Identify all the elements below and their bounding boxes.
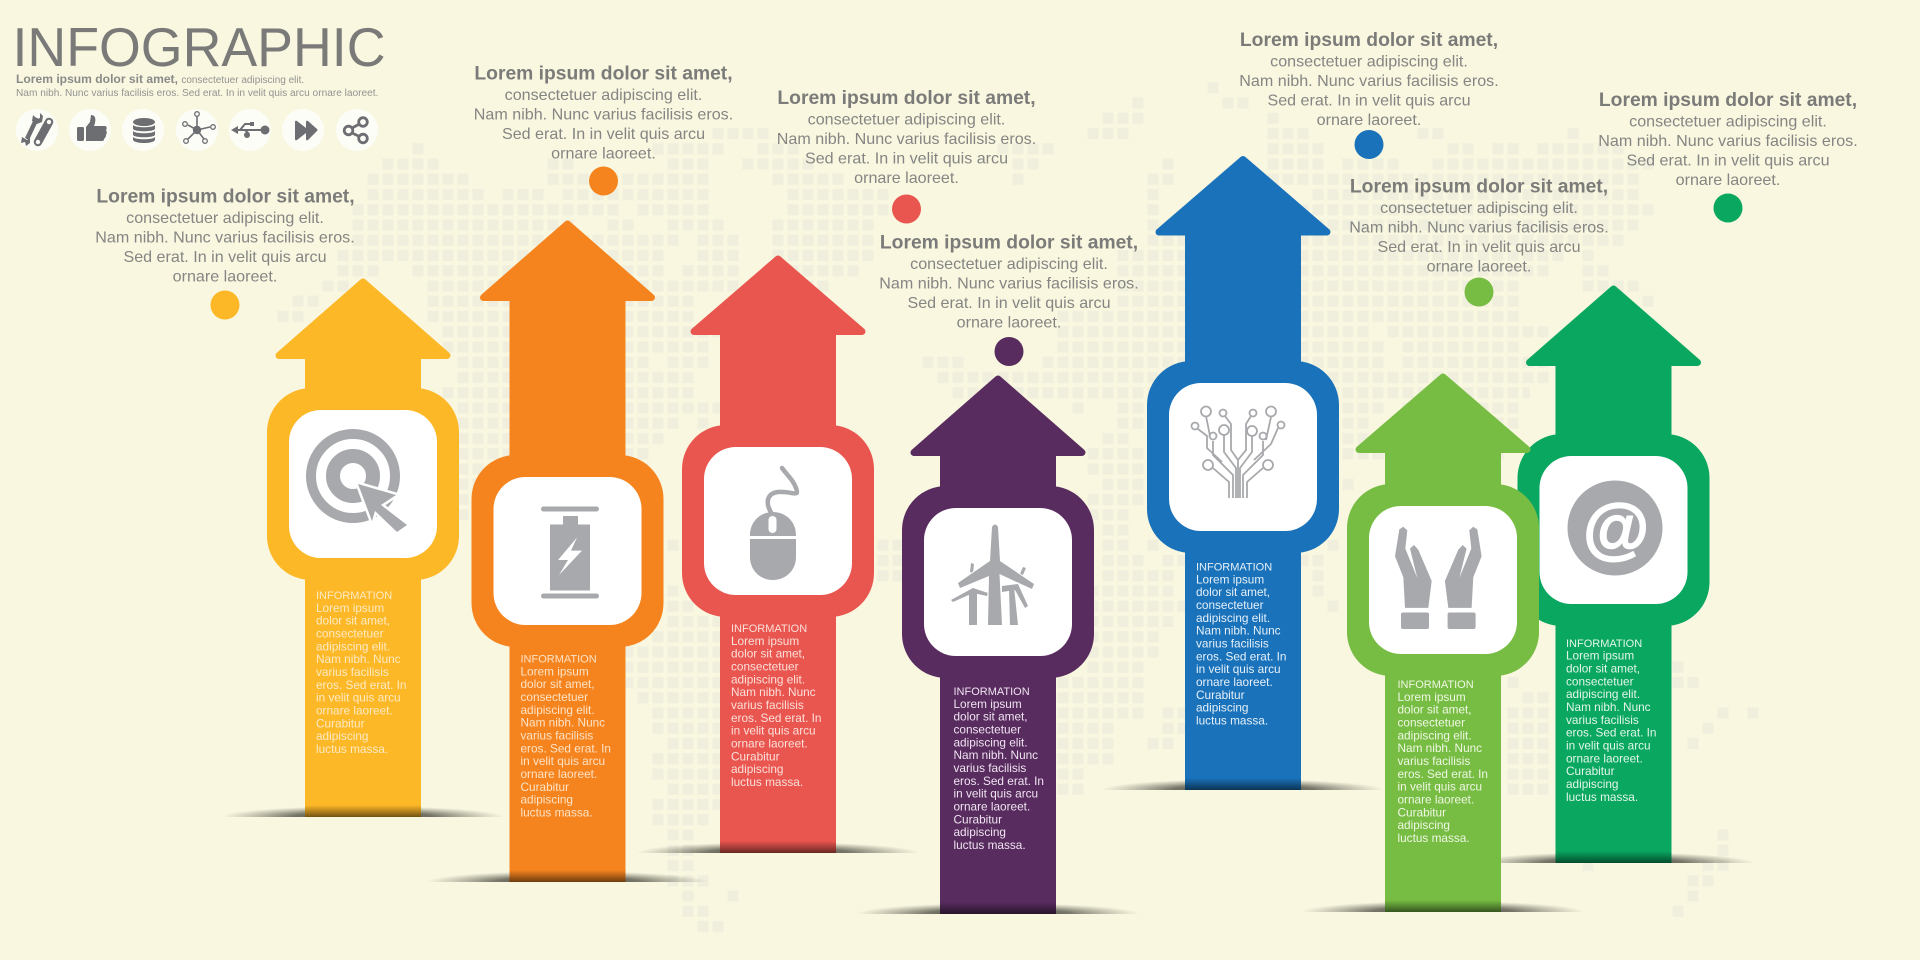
information text: luctus massa. (520, 805, 593, 819)
information text: varius facilisis (1398, 754, 1470, 768)
information text: luctus massa. (954, 838, 1026, 852)
callout: red (777, 88, 1036, 224)
information text: INFORMATION (954, 686, 1030, 698)
icon: wrenches (16, 109, 58, 151)
information text: Curabitur (1196, 688, 1245, 702)
arrow: orange (426, 224, 710, 882)
information text: in velit quis arcu (1398, 780, 1482, 794)
callout: blue: consectetuer adipiscing elit. (1270, 52, 1468, 70)
callout: purple: Lorem ipsum dolor sit amet, (880, 232, 1138, 254)
information text: dolor sit amet, (316, 614, 390, 628)
information text: in velit quis arcu (1196, 662, 1281, 676)
callout: lime: Nam nibh. Nunc varius facilisis eros. (1349, 218, 1609, 236)
callout: green: Nam nibh. Nunc varius facilisis eros. (1598, 132, 1858, 150)
information text: in velit quis arcu (731, 724, 816, 738)
information text: ornare laoreet. (1566, 751, 1643, 765)
arrow: blue (1101, 160, 1385, 790)
callout: purple: ornare laoreet. (957, 313, 1061, 331)
information text: luctus massa. (731, 775, 803, 789)
icon: open hands (1395, 527, 1482, 629)
information text: Curabitur (520, 780, 569, 794)
information text: Nam nibh. Nunc (1566, 700, 1651, 714)
callout: orange: ornare laoreet. (551, 144, 656, 162)
callout: green (1598, 90, 1858, 222)
icon: at sign: @ (1582, 491, 1648, 567)
information text: INFORMATION (520, 654, 597, 666)
information text: adipiscing elit. (1196, 611, 1270, 625)
icon: network (176, 109, 218, 151)
callout: purple: consectetuer adipiscing elit. (910, 255, 1108, 273)
callout: yellow: Sed erat. In in velit quis arcu (123, 248, 327, 266)
arrow: red (636, 259, 920, 853)
callout: green: ornare laoreet. (1676, 171, 1780, 189)
information text: ornare laoreet. (954, 799, 1030, 813)
callout: yellow: Nam nibh. Nunc varius facilisis eros. (95, 228, 355, 246)
information text: adipiscing elit. (520, 703, 595, 717)
icon: usb (229, 109, 271, 151)
information text: adipiscing (1196, 701, 1248, 715)
icon: database (122, 109, 164, 151)
callout: lime: Lorem ipsum dolor sit amet, (1350, 176, 1608, 198)
information text: eros. Sed erat. In (520, 741, 611, 755)
callout: blue: Nam nibh. Nunc varius facilisis eros. (1239, 72, 1499, 90)
information text: eros. Sed erat. In (1398, 767, 1488, 781)
information text: dolor sit amet, (1398, 703, 1472, 717)
information text: eros. Sed erat. In (731, 711, 822, 725)
information text: varius facilisis (1566, 713, 1639, 727)
callout: green: Lorem ipsum dolor sit amet, (1599, 90, 1857, 111)
information text: consectetuer (1398, 715, 1465, 729)
information text: adipiscing elit. (316, 639, 390, 653)
information text: INFORMATION (1196, 562, 1272, 574)
information text: Curabitur (1566, 764, 1615, 778)
icon: circuit tree (1192, 406, 1284, 498)
information text: adipiscing (954, 825, 1006, 839)
callout: orange (474, 64, 733, 196)
information text: ornare laoreet. (1398, 792, 1474, 806)
information text: dolor sit amet, (1566, 661, 1640, 675)
information text: varius facilisis (1196, 636, 1269, 650)
icon: target with cursor (311, 434, 407, 532)
information text: luctus massa. (316, 742, 388, 756)
header subtitle: Lorem ipsum dolor sit amet, consectetuer adipiscing elit. (16, 72, 304, 86)
callout: orange: Sed erat. In in velit quis arcu (502, 125, 705, 143)
header block (12, 17, 386, 151)
information text: eros. Sed erat. In (1566, 726, 1656, 740)
information text: Nam nibh. Nunc (731, 685, 816, 699)
callout: lime: consectetuer adipiscing elit. (1380, 199, 1578, 217)
information text: adipiscing (520, 793, 573, 807)
arrow: lime (1301, 377, 1585, 912)
information text: eros. Sed erat. In (316, 678, 406, 692)
information text: Lorem ipsum (731, 634, 799, 648)
information text: Curabitur (954, 812, 1002, 826)
information text: Nam nibh. Nunc (954, 748, 1038, 762)
information text: luctus massa. (1398, 831, 1470, 845)
callout: green: consectetuer adipiscing elit. (1629, 112, 1827, 130)
arrow: yellow (221, 282, 505, 817)
icon: share (336, 109, 378, 151)
callout: yellow: Lorem ipsum dolor sit amet, (96, 186, 355, 208)
information text: INFORMATION (316, 590, 392, 602)
information text: Lorem ipsum (1398, 690, 1466, 704)
information text: varius facilisis (954, 761, 1026, 775)
information text: INFORMATION (1566, 638, 1642, 650)
callout: red: Sed erat. In in velit quis arcu (805, 149, 1008, 167)
information text: INFORMATION (731, 623, 807, 635)
information text: Nam nibh. Nunc (1398, 741, 1482, 755)
callout: yellow: consectetuer adipiscing elit. (126, 209, 324, 227)
information text: dolor sit amet, (731, 647, 805, 661)
information text: Lorem ipsum (1566, 649, 1634, 663)
callout: orange: consectetuer adipiscing elit. (505, 86, 702, 104)
information text: luctus massa. (1566, 790, 1638, 804)
icon: at sign (1568, 480, 1662, 576)
information text: in velit quis arcu (1566, 738, 1651, 752)
callout: orange: Nam nibh. Nunc varius facilisis eros. (474, 105, 733, 123)
icon: wind turbines (951, 524, 1034, 625)
callout: orange: Lorem ipsum dolor sit amet, (474, 64, 733, 84)
callout: blue: Lorem ipsum dolor sit amet, (1240, 30, 1498, 51)
information text: adipiscing elit. (731, 672, 805, 686)
callout: red: consectetuer adipiscing elit. (808, 110, 1005, 128)
icon: battery (541, 506, 599, 598)
callout: lime: ornare laoreet. (1427, 257, 1531, 275)
information text: ornare laoreet. (316, 703, 393, 717)
callout: purple (879, 232, 1139, 366)
information text: in velit quis arcu (520, 754, 605, 768)
callout: yellow: ornare laoreet. (173, 267, 277, 285)
information text: adipiscing (1398, 818, 1450, 832)
callout: lime (1349, 176, 1609, 306)
information text: Nam nibh. Nunc (316, 652, 401, 666)
information text: dolor sit amet, (1196, 585, 1270, 599)
information text: INFORMATION (1398, 679, 1474, 691)
information text: ornare laoreet. (731, 736, 808, 750)
information text: Curabitur (316, 716, 365, 730)
information text: consectetuer (731, 659, 799, 673)
information text: consectetuer (1196, 598, 1264, 612)
callout: purple: Sed erat. In in velit quis arcu (907, 294, 1111, 312)
header subtitle second line: Nam nibh. Nunc varius facilisis eros. Sed erat. In in velit quis arcu ornare laoreet. (16, 88, 378, 99)
information text: Lorem ipsum (520, 664, 589, 678)
title: INFOGRAPHIC (12, 17, 386, 78)
callout: lime: Sed erat. In in velit quis arcu (1377, 238, 1581, 256)
arrow: purple (856, 379, 1140, 914)
information text: Nam nibh. Nunc (520, 716, 605, 730)
information text: consectetuer (1566, 674, 1634, 688)
information text: adipiscing (316, 729, 368, 743)
information text: adipiscing (731, 762, 783, 776)
callout: red: ornare laoreet. (854, 169, 959, 187)
information text: dolor sit amet, (520, 677, 595, 691)
callout: blue: ornare laoreet. (1317, 111, 1421, 129)
information text: Curabitur (731, 749, 780, 763)
callout: purple: Nam nibh. Nunc varius facilisis eros. (879, 274, 1139, 292)
information text: consectetuer (520, 690, 588, 704)
information text: Curabitur (1398, 805, 1446, 819)
arrow: green (1472, 289, 1756, 863)
icon: computer mouse (750, 468, 797, 580)
callout: blue (1239, 30, 1499, 159)
information text: Lorem ipsum (954, 697, 1022, 711)
information text: ornare laoreet. (520, 767, 597, 781)
information text: varius facilisis (731, 698, 804, 712)
callout: red: Lorem ipsum dolor sit amet, (777, 88, 1036, 109)
information text: varius facilisis (520, 728, 593, 742)
information text: consectetuer (954, 722, 1021, 736)
world map of pixel squares (275, 88, 1760, 926)
information text: adipiscing elit. (1566, 687, 1640, 701)
information text: Lorem ipsum (1196, 572, 1264, 586)
information text: in velit quis arcu (316, 691, 401, 705)
information text: Lorem ipsum (316, 601, 384, 615)
callout: yellow (95, 186, 355, 320)
callout: green: Sed erat. In in velit quis arcu (1626, 151, 1830, 169)
information text: in velit quis arcu (954, 787, 1038, 801)
information text: consectetuer (316, 626, 384, 640)
callout: red: Nam nibh. Nunc varius facilisis eros. (777, 130, 1036, 148)
information text: eros. Sed erat. In (954, 774, 1044, 788)
information text: adipiscing (1566, 777, 1618, 791)
callout: blue: Sed erat. In in velit quis arcu (1267, 91, 1471, 109)
information text: eros. Sed erat. In (1196, 649, 1286, 663)
information text: luctus massa. (1196, 713, 1268, 727)
information text: dolor sit amet, (954, 710, 1028, 724)
icon: fast forward (282, 109, 324, 151)
information text: Nam nibh. Nunc (1196, 624, 1281, 638)
information text: varius facilisis (316, 665, 389, 679)
information text: adipiscing elit. (1398, 728, 1472, 742)
information text: ornare laoreet. (1196, 675, 1273, 689)
icon: thumbs up (69, 109, 111, 151)
information text: adipiscing elit. (954, 735, 1028, 749)
